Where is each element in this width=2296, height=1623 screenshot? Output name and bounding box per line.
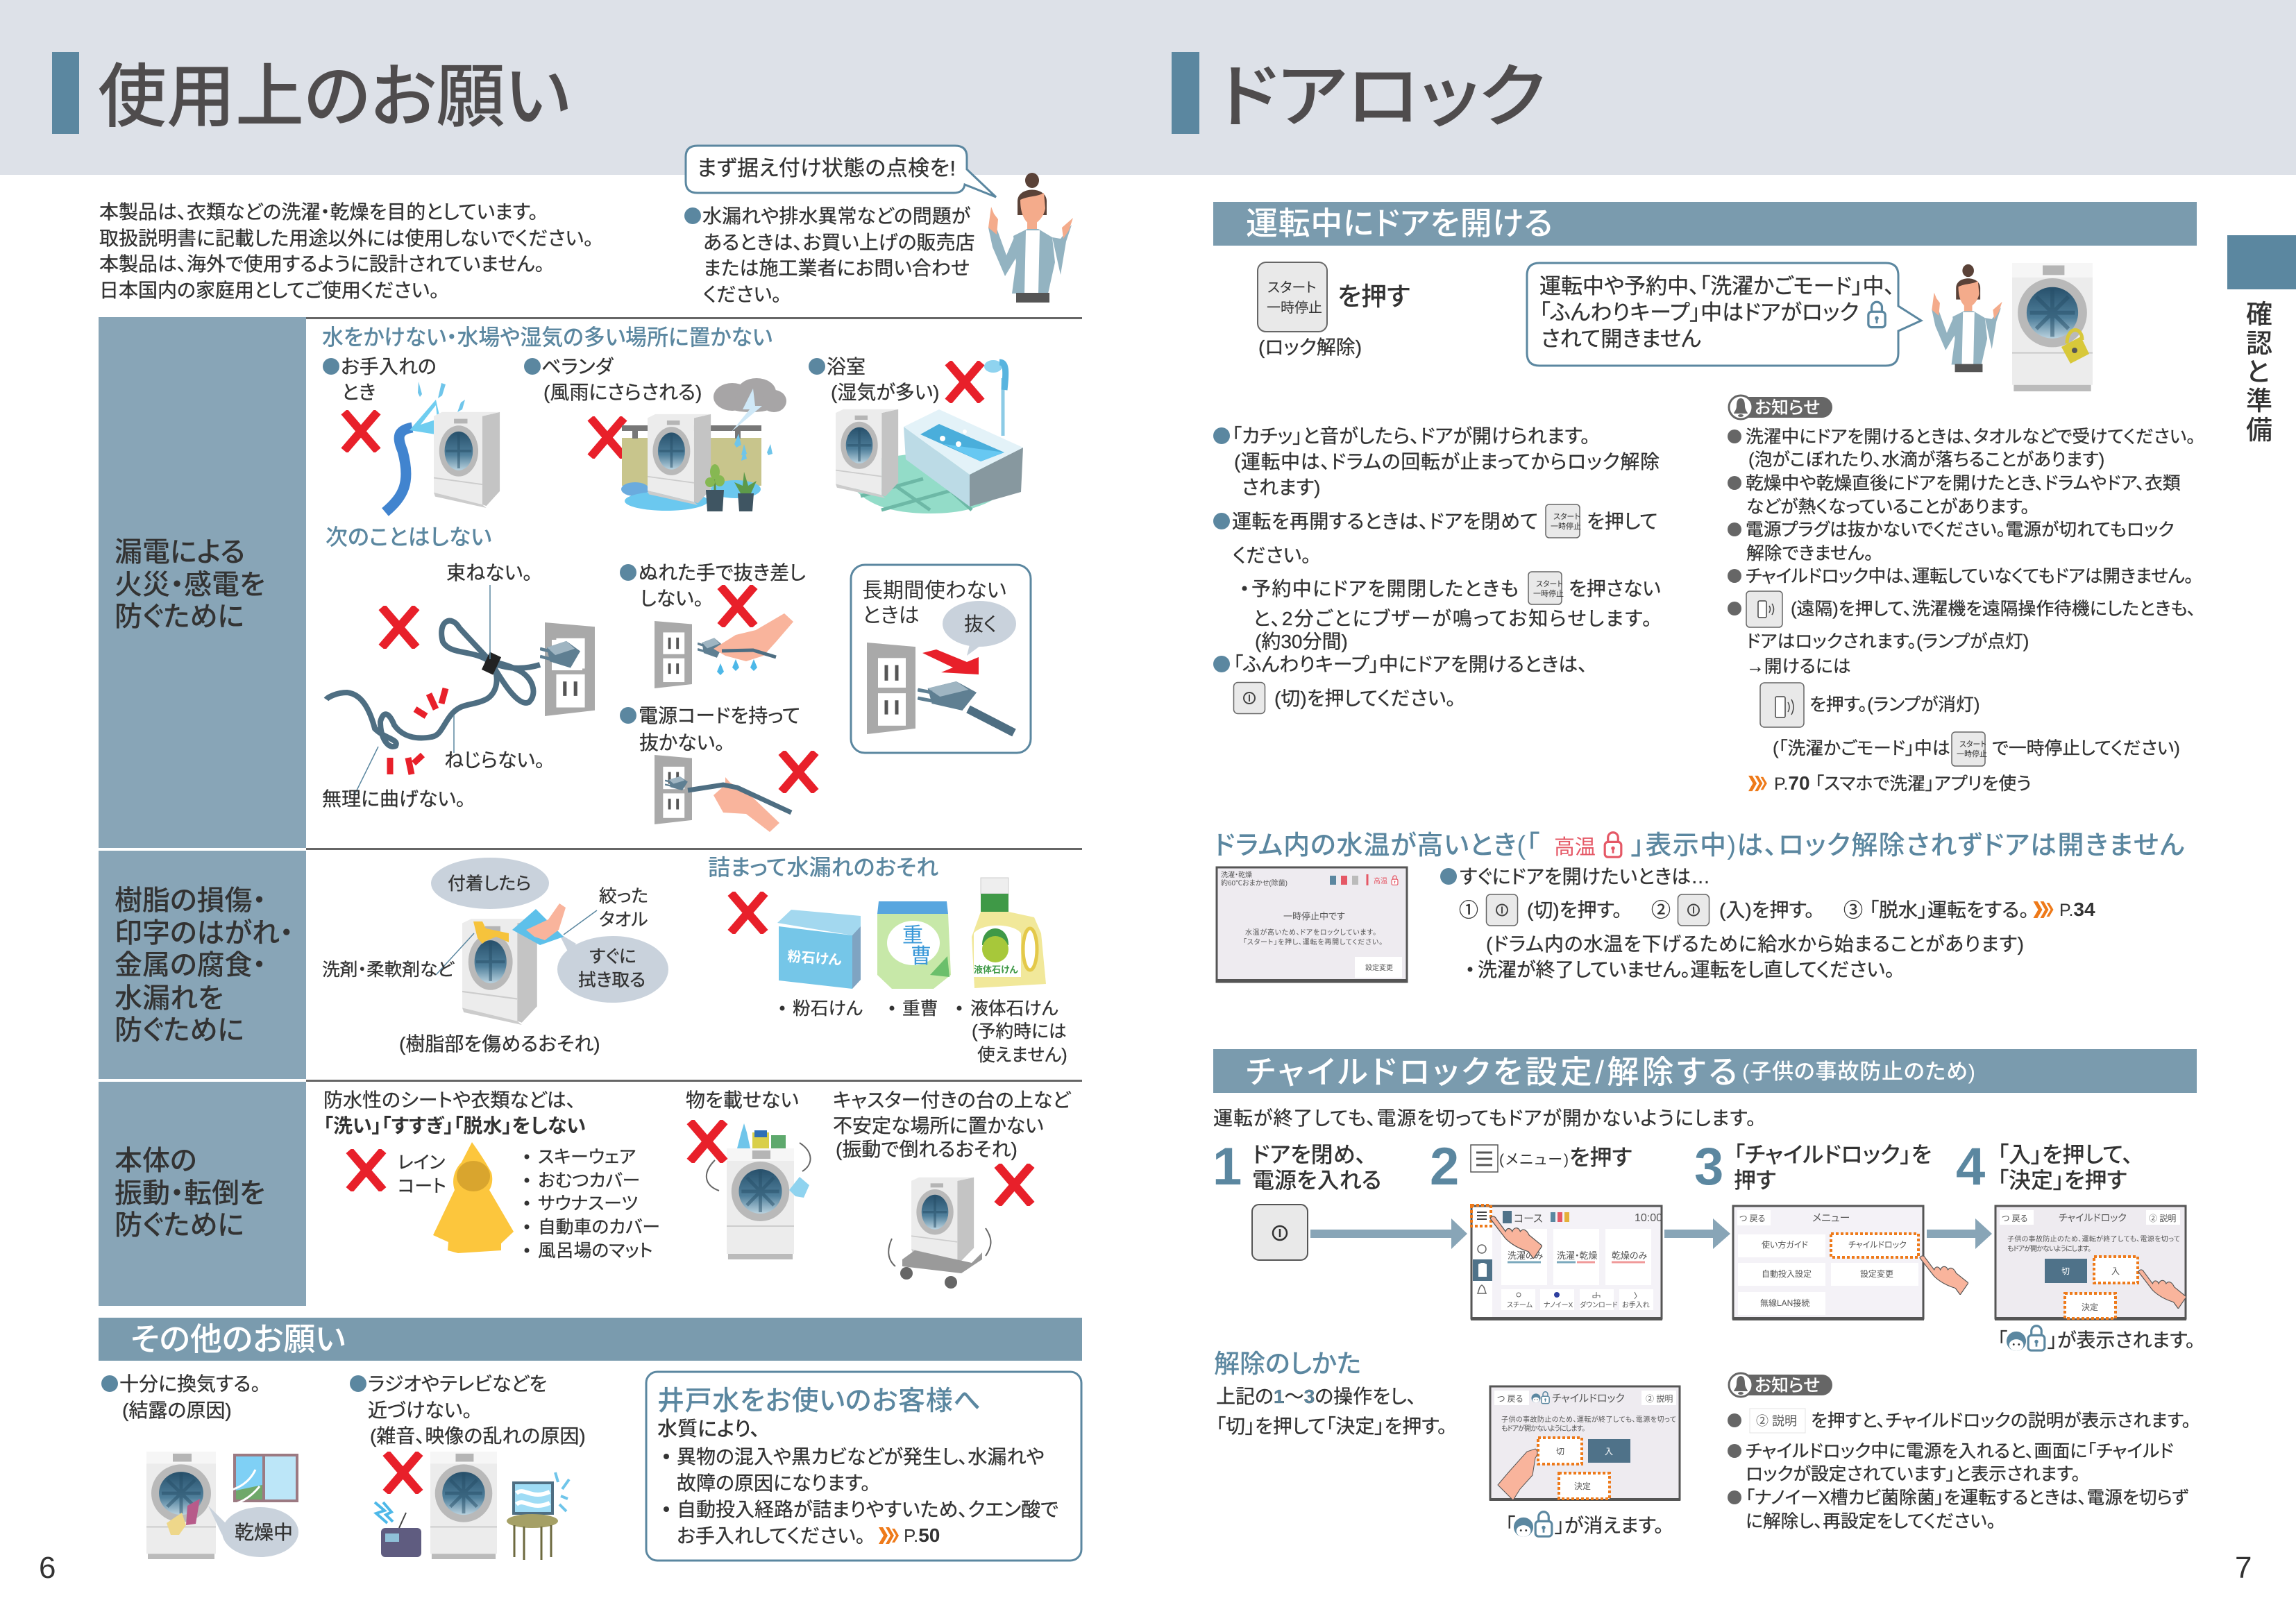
text: release steps: [1216, 1386, 1447, 1437]
screen: menu: 自動投入設定: [1762, 1268, 1812, 1279]
sidebar: electric leakage: [99, 317, 306, 848]
item: balcony: (風雨にさらされる): [543, 382, 702, 403]
sidebar label: 金属の腐食・: [115, 950, 267, 980]
callout: unplug when unused: [851, 565, 1031, 753]
screen: high temperature: 約60℃おまかせ(除菌): [1221, 878, 1288, 887]
text: open immediately steps: 洗濯が終了していません。運転をし直してください。: [1478, 959, 1895, 980]
item: bathroom: (湿気が多い): [831, 382, 940, 403]
page number 7: 7: [2235, 1551, 2252, 1585]
text: open immediately steps: ①: [1459, 899, 1478, 921]
notes: notice list: 一時停止: [1957, 749, 1987, 758]
screen: course menu: コース: [1514, 1213, 1543, 1225]
notice badge: [1729, 396, 1832, 419]
section bar: other requests: [99, 1318, 1082, 1361]
illustration: raincoat: レイン: [398, 1153, 445, 1173]
item: while cleaning: [323, 356, 500, 512]
callout: well water: 故障の原因になります。: [677, 1472, 870, 1494]
text: no waterproof items: [323, 1089, 586, 1137]
screen: high temperature: 洗濯・乾燥: [1221, 870, 1252, 879]
section bar: child lock: (子供の事故防止のため): [1742, 1060, 1975, 1084]
screen: high temperature: [1216, 867, 1408, 983]
item: wet hands: ぬれた手で抜き差し: [639, 562, 806, 584]
illustration: unstable cart: (振動で倒れるおそれ): [836, 1139, 1018, 1160]
step 3: 押す: [1734, 1168, 1776, 1193]
screen: course menu: 乾燥のみ: [1612, 1250, 1647, 1261]
illustration: cord misuse: 束ねない。: [446, 562, 532, 584]
item: balcony: ベランダ: [541, 356, 614, 377]
screen: child lock on: つ 戻る: [2002, 1214, 2027, 1223]
arrow 1: [1310, 1218, 1467, 1249]
notes: notice list: [1728, 427, 2196, 794]
notes: notice list: ドアはロックされます。(ランプが点灯): [1746, 631, 2029, 652]
step 4: 4: [1956, 1137, 1985, 1196]
text: icon disappears: [1505, 1512, 1664, 1537]
illustration: detergent types: 使えません): [977, 1045, 1067, 1065]
speech bubble: door lock: 運転中や予約中、「洗濯かごモード」中、: [1539, 274, 1895, 298]
illustration: unstable cart: キャスター付きの台の上など: [833, 1089, 1072, 1111]
side tab: [2227, 235, 2296, 289]
notes: notice list: チャイルドロック中は、運転していなくてもドアは開きません。: [1746, 566, 2193, 586]
notes: child lock notices: 「ナノイーX槽カビ菌除菌」を運転するときは、電源を切らず: [1746, 1488, 2189, 1508]
notes: door opening: スタート: [1536, 579, 1563, 588]
notes: door opening: (運転中は、ドラムの回転が止まってからロック解除: [1234, 451, 1660, 473]
speech bubble: door lock: [1527, 263, 1921, 366]
screen: menu: 使い方ガイド: [1762, 1239, 1808, 1250]
intro text: 日本国内の家庭用としてご使用ください。: [99, 280, 439, 301]
step 2: を押す: [1569, 1145, 1632, 1170]
screen: child lock off: チャイルドロック: [1552, 1393, 1625, 1404]
screen: high temperature: 高温: [1374, 876, 1387, 885]
step 1: [1213, 1137, 1381, 1196]
callout: well water: 異物の混入や黒カビなどが発生し、水漏れや: [677, 1446, 1045, 1468]
step 1: 電源を入れる: [1252, 1168, 1381, 1193]
screen: course menu: [1471, 1205, 1662, 1320]
illustration: wipe detergent: 拭き取る: [578, 970, 645, 990]
text: open immediately steps: (切)を押す。: [1527, 899, 1622, 921]
text: icon disappears: 「: [1505, 1515, 1516, 1536]
sidebar label: 水漏れを: [115, 983, 223, 1014]
title: 使用上のお願い: 使用上のお願い: [98, 58, 570, 136]
text: open immediately steps: ②: [1651, 899, 1671, 921]
step 2: 2: [1430, 1137, 1459, 1196]
notes: notice list: (泡がこぼれたり、水滴が落ちることがあります): [1748, 450, 2104, 470]
item: ventilate: 十分に換気する。: [119, 1373, 260, 1395]
illustration: cord misuse: [322, 562, 595, 810]
illustration: unstable cart: [833, 1089, 1072, 1289]
item: while cleaning: とき: [341, 382, 375, 403]
illustration: detergent types: 重: [902, 924, 923, 947]
screen: high temperature: 一時停止中です: [1283, 911, 1345, 921]
item: bathroom: 浴室: [827, 356, 866, 377]
sidebar label: 漏電による: [115, 537, 245, 568]
item: wet hands: しない。: [640, 588, 704, 609]
notes: door opening: [1213, 425, 1661, 713]
list: waterproof items: スキーウェア: [538, 1148, 636, 1167]
notes: notice list: 「スマホで洗濯」アプリを使う: [1815, 774, 2032, 794]
text: icon displayed: [1998, 1326, 2195, 1351]
list: waterproof items: 自動車のカバー: [538, 1217, 660, 1237]
arrow 3: [1927, 1218, 1992, 1249]
notes: door opening: スタート: [1553, 512, 1580, 521]
notes: door opening: (切)を押してください。: [1274, 688, 1455, 709]
callout: well water: 水質により、: [657, 1418, 760, 1441]
text: open immediately steps: すぐにドアを開けたいときは…: [1460, 866, 1710, 887]
item: balcony: [524, 356, 786, 511]
illustration: cord misuse: 無理に曲げない。: [322, 788, 466, 810]
text: open immediately steps: 「脱水」運転をする。: [1869, 899, 2029, 921]
panel: electric leakage: [99, 317, 1082, 848]
notes: notice list: (「洗濯かごモード」中は: [1773, 738, 1950, 758]
item: wet hands: [620, 562, 806, 688]
heading: drum high temperature: 高温: [1554, 836, 1596, 859]
notes: notice list: で一時停止してください): [1992, 738, 2180, 758]
illustration: detergent types: [731, 878, 1067, 1065]
screen: child lock off: 決定: [1574, 1481, 1591, 1491]
sidebar label: [115, 537, 265, 632]
illustration: detergent types: (予約時には: [972, 1021, 1067, 1042]
notice badge 2: [1729, 1373, 1832, 1397]
notes: door opening: 一時停止: [1551, 522, 1581, 531]
heading: drum high temperature: [1214, 831, 2184, 860]
item: radio and TV: ラジオやテレビなどを: [368, 1373, 547, 1395]
notes: notice list: 解除できません。: [1746, 543, 1873, 563]
callout: well water: 自動投入経路が詰まりやすいため、クエン酸で: [677, 1499, 1058, 1520]
notes: notice list: (遠隔)を押して、洗濯機を遠隔操作待機にしたときも、: [1791, 599, 2196, 619]
illustration: detergent types: 液体石けん: [970, 999, 1058, 1019]
notice badge 2: お知らせ: [1755, 1376, 1820, 1395]
notes: notice list: などが熱くなっていることがあります。: [1746, 497, 2029, 517]
step 2: (メニュー): [1499, 1152, 1569, 1168]
item: while cleaning: お手入れの: [341, 356, 437, 377]
screen: menu: 無線LAN接続: [1760, 1298, 1809, 1308]
button: start/pause unlock: 一時停止: [1267, 300, 1322, 316]
illustration: wipe detergent: 付着したら: [448, 874, 531, 894]
notes: child lock notices: ② 説明: [1756, 1414, 1797, 1428]
illustration: detergent types: 曹: [911, 945, 931, 968]
notes: door opening: 予約中にドアを開閉したときも: [1251, 578, 1519, 600]
left header band: [0, 0, 2296, 175]
speech bubble: inspection: まず据え付け状態の点検を!: [697, 156, 956, 180]
button: start/pause unlock: (ロック解除): [1258, 337, 1362, 358]
heading: keep away from water: 水をかけない・水場や湿気の多い場所に置かない: [322, 325, 773, 350]
note: leak contact: または施工業者にお問い合わせ: [703, 257, 970, 279]
step 4: 「入」を押して、: [1998, 1142, 2133, 1167]
heading: do not do the following: 次のことはしない: [326, 525, 491, 550]
screen: child lock on: 決定: [2082, 1302, 2098, 1312]
notes: notice list: 洗濯中にドアを開けるときは、タオルなどで受けてください。: [1746, 427, 2195, 447]
screen: course menu: ナノイーX: [1544, 1301, 1573, 1309]
screen: course menu: 洗濯・乾燥: [1557, 1250, 1598, 1261]
sidebar label: 防ぐために: [115, 1210, 244, 1241]
text: child lock intro: 運転が終了しても、電源を切ってもドアが開かないようにします。: [1213, 1107, 1756, 1129]
callout: well water: [646, 1372, 1081, 1561]
text: open immediately steps: (ドラム内の水温を下げるために給水から始まることがあります): [1486, 933, 2024, 955]
text: release steps: 「切」を押して「決定」を押す。: [1216, 1416, 1447, 1437]
screen: child lock on: もドアが開かないようにします。: [2007, 1244, 2091, 1253]
screen: child lock off: 切: [1556, 1447, 1564, 1456]
sidebar label: 火災・感電を: [115, 570, 265, 600]
screen: child lock off: 入: [1605, 1447, 1613, 1456]
illustration: raincoat: コート: [398, 1177, 446, 1196]
sidebar label: [115, 1146, 265, 1241]
button: start/pause unlock: [1258, 262, 1410, 358]
sidebar: vibration: [99, 1082, 306, 1306]
screen: child lock on: ② 説明: [2149, 1213, 2176, 1223]
notes: door opening: (約30分間): [1255, 631, 1348, 652]
screen: course menu: 10:00: [1635, 1212, 1662, 1224]
side label: 確認と準備: 確: [2246, 300, 2272, 330]
screen: high temperature: 「スタート」を押し、運転を再開してください。: [1243, 937, 1383, 946]
sidebar label: 本体の: [115, 1146, 197, 1176]
title: ドアロック: ドアロック: [1218, 58, 1546, 136]
illustration: wipe detergent: すぐに: [589, 947, 636, 967]
screen: menu: チャイルドロック: [1848, 1240, 1907, 1250]
screen: course menu: お手入れ: [1622, 1300, 1650, 1309]
heading: drum high temperature: ドラム内の水温が高いとき(「: [1214, 831, 1539, 860]
item: radio and TV: (雑音、映像の乱れの原因): [370, 1425, 586, 1447]
screen: course menu: ダウンロード: [1580, 1300, 1618, 1309]
text: icon displayed: 」が表示されます。: [2047, 1329, 2195, 1351]
item: ventilate: 乾燥中: [235, 1522, 293, 1543]
notes: child lock notices: チャイルドロック中に電源を入れると、画面に「チャイルド: [1746, 1441, 2174, 1461]
button: start/pause unlock: を押す: [1337, 282, 1410, 311]
button: start/pause unlock: スタート: [1267, 280, 1317, 296]
item: ventilate: [101, 1373, 298, 1559]
notes: door opening: を押さない: [1569, 578, 1661, 600]
sidebar label: 振動・転倒を: [115, 1178, 265, 1209]
sidebar: resin damage: [99, 851, 306, 1079]
section bar: open during operation: [1213, 202, 2197, 246]
illustration: wipe detergent: 絞った: [599, 886, 648, 906]
text: no waterproof items: 「洗い」「すすぎ」「脱水」をしない: [323, 1115, 586, 1137]
button: power on: [1252, 1205, 1308, 1260]
list: waterproof items: サウナスーツ: [538, 1194, 638, 1214]
page number 6: 6: [39, 1551, 56, 1585]
callout: unplug when unused: 長期間使わない: [862, 579, 1006, 602]
step 4: [1956, 1137, 2133, 1196]
heading: drum high temperature: 」表示中)は、ロック解除されずドアは開きません: [1631, 831, 2184, 860]
text: icon displayed: 「: [1998, 1329, 2008, 1351]
section bar: other requests: その他のお願い: [130, 1321, 346, 1357]
side label: 確認と準備: 準: [2246, 387, 2272, 416]
text: open immediately steps: ③: [1843, 899, 1863, 921]
side label: 確認と準備: [2246, 300, 2272, 445]
sidebar label: 防ぐために: [115, 1015, 244, 1046]
callout: well water: 井戸水をお使いのお客様へ: [657, 1386, 981, 1416]
intro text: 本製品は、衣類などの洗濯・乾燥を目的としています。: [99, 201, 538, 223]
notes: door opening: 「ふんわりキープ」中にドアを開けるときは、: [1233, 654, 1587, 675]
text: release steps: 上記の1〜3の操作をし、: [1216, 1386, 1417, 1407]
speech bubble: door lock: 「ふんわりキープ」中はドアがロック: [1539, 300, 1859, 325]
screen: child lock on: 切: [2061, 1266, 2070, 1276]
screen: menu: [1732, 1206, 1968, 1320]
illustration: raincoat: [349, 1142, 514, 1253]
step 3: 「チャイルドロック」を: [1734, 1142, 1932, 1167]
notes: notice list: スタート: [1959, 740, 1986, 749]
step 1: ドアを閉め、: [1252, 1142, 1367, 1167]
illustration: cord misuse: ねじらない。: [444, 749, 545, 771]
arrow 2: [1664, 1218, 1730, 1249]
notes: notice list: P.70: [1774, 772, 1810, 794]
illustration: detergent types: 粉石けん: [787, 949, 843, 968]
note: leak contact: ください。: [703, 284, 782, 305]
intro text: [99, 201, 593, 301]
sidebar label: 防ぐために: [115, 602, 244, 632]
screen: child lock on: [1995, 1206, 2186, 1320]
notes: door opening: 「カチッ」と音がしたら、ドアが開けられます。: [1232, 425, 1590, 447]
heading: how to release: 解除のしかた: [1214, 1350, 1361, 1378]
callout: well water: お手入れしてください。: [677, 1525, 866, 1547]
item: pulling cord: 電源コードを持って: [639, 705, 800, 726]
side label: 確認と準備: 備: [2246, 416, 2272, 445]
callout: well water: P.50: [904, 1524, 940, 1546]
notes: notice list: を押す。(ランプが消灯): [1809, 695, 1980, 715]
notice badge: お知らせ: [1755, 398, 1820, 418]
screen: child lock on: チャイルドロック: [2059, 1212, 2127, 1223]
icon: person advising: [988, 173, 1073, 303]
illustration: wipe detergent: 洗剤・柔軟剤など: [322, 960, 455, 980]
step 3: 3: [1694, 1137, 1723, 1196]
heading: clogging leak: 詰まって水漏れのおそれ: [708, 855, 938, 880]
illustration: wipe detergent: (樹脂部を傷めるおそれ): [399, 1033, 600, 1055]
side label: 確認と準備: 認: [2246, 330, 2272, 359]
illustration: detergent types: 重曹: [902, 999, 938, 1019]
screen: high temperature: 水温が高いため、ドアをロックしています。: [1245, 928, 1376, 937]
notes: door opening: を押して: [1587, 511, 1657, 532]
item: pulling cord: [620, 705, 816, 832]
list: waterproof items: 風呂場のマット: [538, 1241, 653, 1261]
text: icon disappears: 」が消えます。: [1554, 1515, 1664, 1536]
item: radio and TV: 近づけない。: [368, 1400, 472, 1421]
illustration: detergent types: 粉石けん: [793, 999, 863, 1019]
illustration: unstable cart: 不安定な場所に置かない: [833, 1115, 1044, 1137]
text: no waterproof items: 防水性のシートや衣類などは、: [323, 1089, 576, 1111]
panel: resin damage: [99, 848, 1082, 1079]
note: leak contact: [684, 205, 975, 305]
notes: child lock notices: に解除し、再設定をしてください。: [1746, 1511, 1995, 1531]
step 2: [1430, 1137, 1632, 1196]
screen: child lock off: もドアが開かないようにします。: [1501, 1424, 1585, 1433]
speech bubble: inspection: [686, 146, 996, 197]
screen: course menu: スチーム: [1506, 1301, 1533, 1309]
illustration: nothing on top: [686, 1089, 811, 1259]
item: pulling cord: 抜かない。: [639, 732, 725, 754]
item: ventilate: (結露の原因): [122, 1400, 232, 1421]
notes: child lock notices: を押すと、チャイルドロックの説明が表示されます。: [1811, 1411, 2191, 1431]
item: radio and TV: [350, 1373, 586, 1560]
notes: child lock notices: [1728, 1409, 2191, 1531]
step 4: 「決定」を押す: [1998, 1168, 2127, 1193]
notes: notice list: 乾燥中や乾燥直後にドアを開けたとき、ドラムやドア、衣類: [1746, 473, 2181, 493]
step 3: [1694, 1137, 1932, 1196]
illustration: detergent types: 液体石けん: [974, 965, 1018, 975]
section bar: open during operation: 運転中にドアを開ける: [1246, 205, 1553, 241]
screen: menu: つ 戻る: [1739, 1214, 1765, 1223]
text: open immediately steps: [1440, 866, 2095, 980]
notes: notice list: 電源プラグは抜かないでください。電源が切れてもロック: [1746, 520, 2175, 540]
intro text: 本製品は、海外で使用するように設計されていません。: [99, 253, 544, 275]
screen: child lock off: つ 戻る: [1497, 1394, 1523, 1404]
illustration: nothing on top: 物を載せない: [686, 1089, 799, 1111]
note: leak contact: 水漏れや排水異常などの問題が: [702, 205, 971, 227]
screen: child lock on: 子供の事故防止のため、運転が終了しても、電源を切って: [2007, 1234, 2180, 1243]
side label: 確認と準備: と: [2246, 358, 2269, 387]
screen: child lock off: [1489, 1386, 1680, 1501]
step 1: 1: [1213, 1137, 1242, 1196]
illustration: wipe detergent: タオル: [599, 910, 648, 930]
illustration: wipe detergent: [322, 858, 668, 1055]
notes: door opening: と、2分ごとにブザーが鳴ってお知らせします。: [1253, 608, 1652, 629]
screen: course menu: 洗濯のみ: [1508, 1250, 1543, 1261]
illustration: person and locked washer: [1932, 263, 2093, 391]
intro text: 取扱説明書に記載した用途以外には使用しないでください。: [99, 228, 593, 249]
speech bubble: door lock: されて開きません: [1541, 327, 1701, 351]
screen: child lock off: ② 説明: [1646, 1393, 1673, 1404]
panel: vibration: [99, 1080, 1082, 1306]
screen: child lock off: 子供の事故防止のため、運転が終了しても、電源を切って: [1501, 1415, 1676, 1424]
text: open immediately steps: (入)を押す。: [1719, 899, 1814, 921]
list: waterproof items: [525, 1148, 660, 1261]
screen: menu: メニュー: [1812, 1212, 1850, 1224]
section bar: child lock: チャイルドロックを設定/解除する: [1246, 1054, 1737, 1090]
callout: unplug when unused: ときは: [862, 604, 920, 627]
item: bathroom: [809, 356, 1023, 513]
sidebar label: 樹脂の損傷・: [115, 885, 267, 916]
notes: door opening: 一時停止: [1533, 589, 1564, 598]
list: waterproof items: おむつカバー: [538, 1171, 640, 1191]
title accent: left: [52, 52, 79, 134]
sidebar label: [115, 885, 294, 1046]
screen: menu: 設定変更: [1860, 1268, 1893, 1279]
callout: unplug when unused: 抜く: [964, 613, 997, 635]
note: leak contact: あるときは、お買い上げの販売店: [703, 232, 975, 253]
screen: high temperature: 設定変更: [1365, 963, 1393, 972]
text: open immediately steps: P.34: [2059, 899, 2095, 920]
notes: door opening: ください。: [1233, 545, 1311, 566]
title accent: right: [1172, 52, 1199, 134]
notes: door opening: されます): [1242, 477, 1320, 498]
screen: child lock on: 入: [2111, 1266, 2120, 1276]
notes: door opening: 運転を再開するときは、ドアを閉めて: [1232, 511, 1538, 532]
notes: notice list: →開けるには: [1746, 657, 1851, 677]
notes: child lock notices: ロックが設定されています」と表示されます。: [1746, 1464, 2080, 1484]
section bar: child lock: [1213, 1049, 2197, 1093]
sidebar label: 印字のはがれ・: [115, 918, 294, 949]
